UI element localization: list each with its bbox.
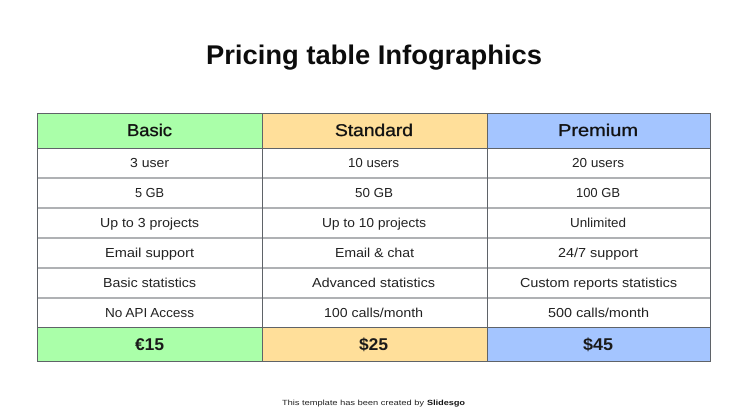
title: Pricing table Infographics — [206, 40, 542, 70]
panel: Standard features: 50 GB — [355, 185, 393, 200]
panel: header row: Basic — [127, 121, 173, 140]
footer credit: This template has been created by — [282, 398, 424, 407]
footer credit: Slidesgo — [427, 398, 465, 407]
pricing table — [37, 113, 711, 362]
panel: Standard features: 10 users — [348, 155, 399, 170]
panel: header row — [37, 113, 711, 148]
panel: price row: €15 — [135, 335, 164, 354]
panel: price row: $45 — [583, 335, 613, 354]
panel: price row: $25 — [359, 335, 388, 354]
panel: Premium features: 20 users — [572, 155, 625, 170]
panel: header row: Premium — [558, 121, 638, 140]
panel: Premium features — [520, 155, 678, 320]
panel: Premium features: Custom reports statistics — [520, 275, 678, 290]
panel: Basic features: 5 GB — [135, 185, 164, 200]
panel: header row: Standard — [335, 121, 413, 140]
panel: Standard features: Advanced statistics — [312, 275, 436, 290]
panel: Premium features: 100 GB — [576, 185, 620, 200]
panel: Premium features: 500 calls/month — [548, 305, 649, 320]
panel: Standard features — [312, 155, 436, 320]
panel: Basic features: Up to 3 projects — [100, 215, 200, 230]
footer credit — [282, 398, 465, 407]
panel: Basic features: Email support — [105, 245, 194, 260]
panel: Standard features: Email & chat — [335, 245, 414, 260]
panel: price row — [37, 327, 711, 362]
panel: Basic features: No API Access — [105, 305, 195, 320]
panel: Standard features: Up to 10 projects — [322, 215, 427, 230]
panel: Basic features: Basic statistics — [103, 275, 197, 290]
panel: Basic features: 3 user — [130, 155, 170, 170]
panel: Standard features: 100 calls/month — [324, 305, 423, 320]
panel: Premium features: Unlimited — [570, 215, 626, 230]
panel: Premium features: 24/7 support — [558, 245, 638, 260]
panel: Basic features — [100, 155, 200, 320]
